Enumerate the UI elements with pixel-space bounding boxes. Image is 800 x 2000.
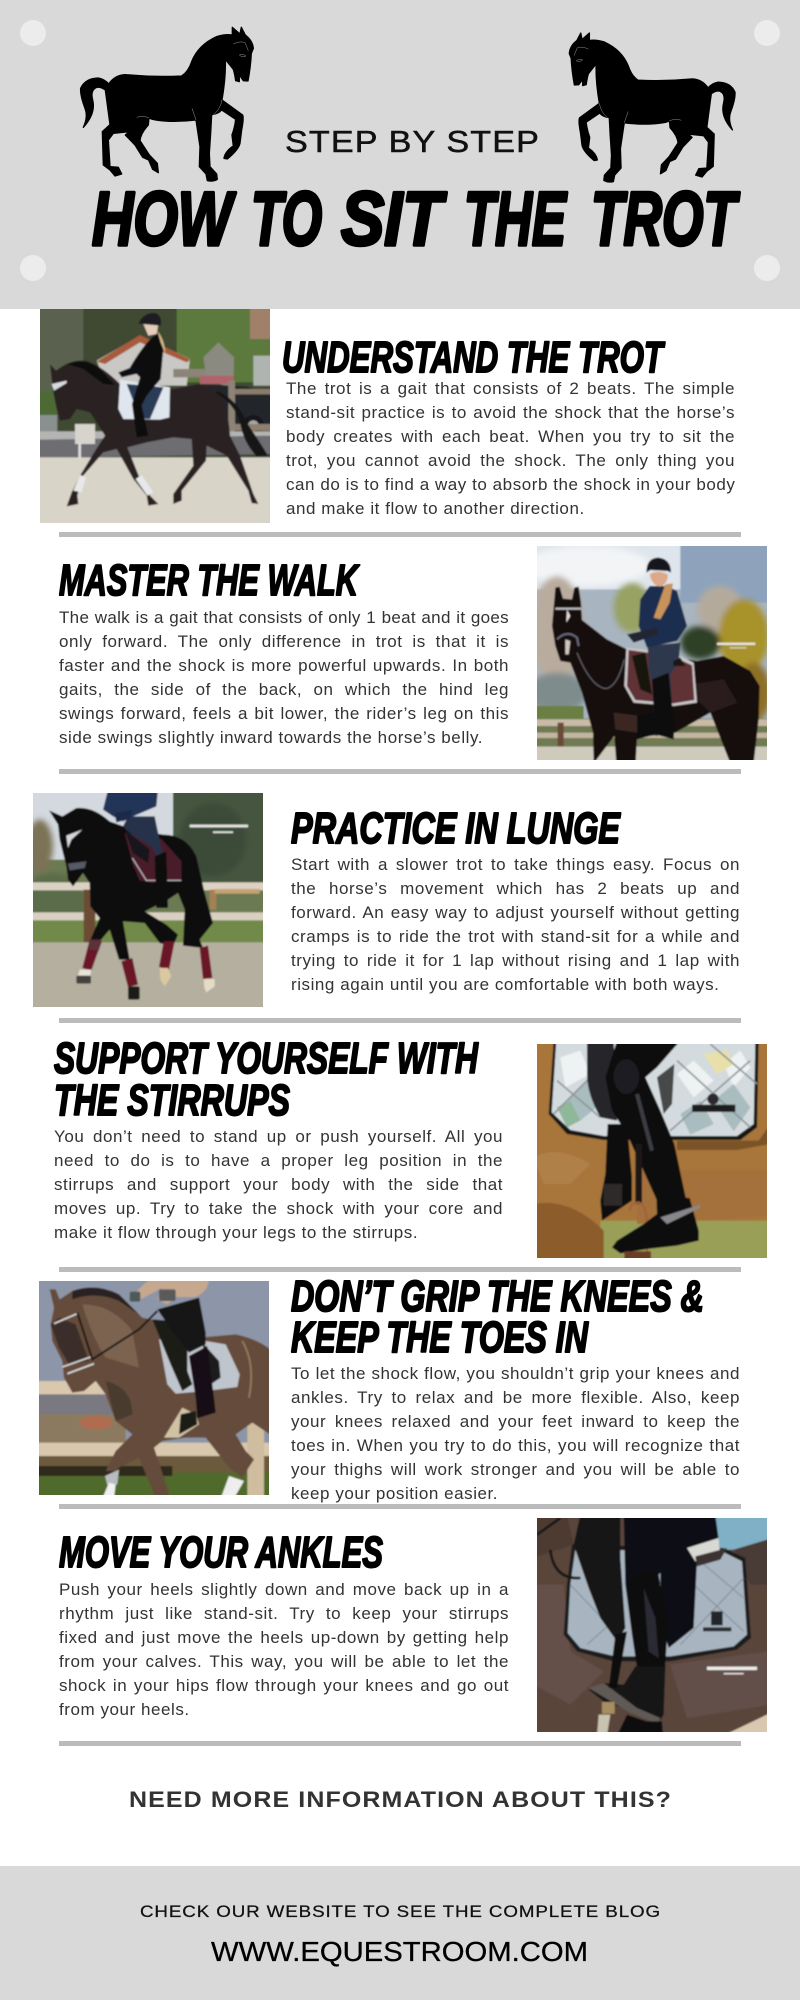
subtitle: STEP BY STEP xyxy=(285,125,540,159)
website url: WWW.EQUESTROOM.COM xyxy=(211,1936,588,1967)
body text: Push your heels slightly down and move back up in a xyxy=(59,1580,509,1599)
photo: black horse with burgundy wraps xyxy=(33,793,263,1007)
body text: cramps is to ride the trot with stand-sit for a while and xyxy=(291,927,740,946)
call to action heading: NEED MORE INFORMATION ABOUT THIS? xyxy=(129,1787,672,1812)
body text: faster and the shock is more powerful upwards. In both xyxy=(59,656,509,675)
heading: line one and two: KEEP THE TOES IN xyxy=(291,1313,589,1362)
body text xyxy=(291,1364,740,1503)
photo: brown horse close-up xyxy=(39,1281,269,1495)
body text: make it flow through your legs to the stirrups. xyxy=(54,1223,418,1242)
icon: right horse xyxy=(569,33,735,182)
body text xyxy=(59,1580,509,1719)
body text: The trot is a gait that consists of 2 beats. The simple xyxy=(286,379,735,398)
panel: move your ankles xyxy=(58,1518,767,1732)
heading: PRACTICE IN LUNGE xyxy=(291,804,621,853)
body text: moves up. Try to take the shock with your core and xyxy=(54,1199,503,1218)
body text: forward. An easy way to adjust yourself without getting xyxy=(291,903,740,922)
heading: line one and two xyxy=(54,1034,480,1125)
photo: black boot and holographic saddle pad xyxy=(537,1044,767,1258)
panel: master the walk xyxy=(58,546,767,760)
body text: ankles. Try to relax and be more flexible. Also, keep xyxy=(291,1388,740,1407)
title: TROT xyxy=(591,177,740,262)
body text xyxy=(54,1127,503,1242)
body text: toes in. When you try to do this, you will recognize that xyxy=(291,1436,740,1455)
footer line: CHECK OUR WEBSITE TO SEE THE COMPLETE BLOG xyxy=(140,1902,661,1921)
body text: The walk is a gait that consists of only 1 beat and it goes xyxy=(59,608,509,627)
corner dots xyxy=(20,20,780,281)
photo: leg on silver saddle pad xyxy=(537,1518,767,1732)
title xyxy=(92,177,740,262)
body text: trying to ride it for 1 lap without rising and 1 lap with xyxy=(291,951,740,970)
heading: line one and two: SUPPORT YOURSELF WITH xyxy=(54,1034,479,1083)
heading: line one and two xyxy=(290,1272,704,1362)
body text: swings forward, feels a bit lower, the rider’s leg on this xyxy=(59,704,509,723)
body text: gaits, the side of the back, on which the hind leg xyxy=(59,680,509,699)
body text: shock in your hips flow through your knees and go out xyxy=(59,1676,509,1695)
body text xyxy=(286,379,735,518)
title: TO xyxy=(251,177,322,262)
body text: from your heels. xyxy=(59,1700,190,1719)
panel: understand the trot xyxy=(40,309,735,523)
body text: rising again until you are comfortable with both ways. xyxy=(291,975,719,994)
panel: support yourself with the stirrups xyxy=(54,1034,767,1258)
body text: the horse’s movement which has 2 beats up and xyxy=(291,879,740,898)
body text: fixed and just move the heels up-down by getting help xyxy=(59,1628,509,1647)
photo: smiling rider on black horse xyxy=(537,546,767,760)
body text: body creates with each beat. When you try to sit the xyxy=(286,427,735,446)
panel: practice in lunge xyxy=(33,793,740,1007)
body text: your thighs will work stronger and you will be able to xyxy=(291,1460,740,1479)
body text: can do is to find a way to absorb the shock in your body xyxy=(286,475,735,494)
body text: keep your position easier. xyxy=(291,1484,498,1503)
title: HOW xyxy=(92,177,237,262)
icon: left horse xyxy=(81,27,253,181)
body text: side swings slightly inward towards the horse’s belly. xyxy=(59,728,483,747)
body text: only forward. The only difference in trot is that it is xyxy=(59,632,509,651)
heading: MASTER THE WALK xyxy=(59,556,360,605)
body text: need to do is to have a proper leg position in the xyxy=(54,1151,503,1170)
body text: trot, you cannot avoid the shock. The only thing you xyxy=(286,451,735,470)
title: THE xyxy=(464,177,568,262)
body text: To let the shock flow, you shouldn’t grip your knees and xyxy=(291,1364,740,1383)
photo: rider trotting on dark horse xyxy=(40,309,270,523)
footer band xyxy=(0,1866,800,2000)
body text xyxy=(291,855,740,994)
heading: MOVE YOUR ANKLES xyxy=(59,1528,383,1577)
header banner xyxy=(0,0,800,309)
title: SIT xyxy=(341,177,447,262)
body text: rhythm just like stand-sit. Try to keep your stirrups xyxy=(59,1604,509,1623)
body text: your knees relaxed and your feet inward to keep the xyxy=(291,1412,740,1431)
body text: from your calves. This way, you will be able to let the xyxy=(59,1652,509,1671)
body text: and make it flow to another direction. xyxy=(286,499,585,518)
body text: stirrups and support your body with the side that xyxy=(54,1175,503,1194)
body text: Start with a slower trot to take things easy. Focus on xyxy=(291,855,740,874)
panel: don't grip the knees xyxy=(39,1272,740,1503)
body text xyxy=(59,608,509,747)
body text: You don’t need to stand up or push yourself. All you xyxy=(54,1127,503,1146)
heading: line one and two: THE STIRRUPS xyxy=(54,1076,290,1125)
body text: stand-sit practice is to avoid the shock that the horse’s xyxy=(286,403,735,422)
